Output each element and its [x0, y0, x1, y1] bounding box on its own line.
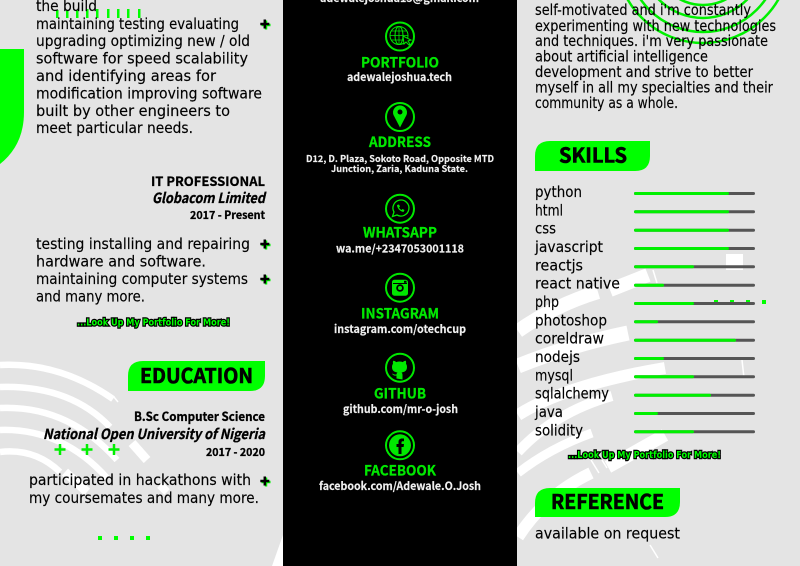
- contact: whatsapp: wa.me/+2347053001118: [336, 241, 464, 257]
- callout: portfolio link left: ...Look Up My Portfolio For More!: [77, 318, 230, 328]
- decoration: green concentric arcs: [616, 0, 790, 43]
- text block: about me: self-motivated and i'm constantly: [535, 1, 751, 19]
- text block: experience duties two: testing installing and repairing: [36, 235, 250, 253]
- skills list: [534, 183, 620, 439]
- skills list: react native: [535, 275, 620, 293]
- contact: instagram: INSTAGRAM: [361, 304, 439, 324]
- decoration: green side tab: [0, 49, 24, 164]
- heading: skills: SKILLS: [559, 140, 627, 168]
- text block: experience duties one: modification improving software: [36, 84, 262, 102]
- contact: facebook: FACEBOOK: [364, 461, 436, 481]
- skill bars: [634, 192, 755, 433]
- text block: experience duties two: [36, 235, 250, 306]
- contact: whatsapp: [336, 223, 464, 257]
- contact: facebook: [319, 461, 481, 494]
- skills list: sqlalchemy: [535, 385, 609, 403]
- decoration: green squares: [98, 536, 150, 540]
- bullets: plus markers: [260, 20, 270, 486]
- icon: map pin: [386, 103, 414, 131]
- education details: B.Sc Computer Science: [134, 406, 265, 425]
- text block: experience duties one: and identifying areas for: [36, 67, 217, 85]
- text: reference note: available on request: [535, 524, 680, 542]
- icon: facebook: [386, 431, 414, 459]
- skills list: python: [535, 183, 582, 201]
- skills list: html: [535, 201, 563, 219]
- text block: about me: about artificial intelligence: [535, 48, 708, 66]
- text block: about me: development and strive to better: [535, 63, 754, 81]
- skills list: mysql: [535, 366, 573, 384]
- skills list: php: [535, 293, 559, 311]
- skills list: reactjs: [535, 256, 583, 274]
- icon: instagram: [386, 274, 414, 302]
- skills list: nodejs: [535, 348, 580, 366]
- text block: education activities: participated in hackathons with: [29, 471, 251, 489]
- text block: experience duties one: software for speed scalability: [36, 50, 248, 68]
- text block: experience duties one: maintaining testing evaluating: [36, 15, 239, 33]
- text block: education activities: [29, 471, 259, 507]
- text block: experience duties one: meet particular needs.: [36, 119, 193, 137]
- callout: portfolio link right: ...Look Up My Portfolio For More!: [568, 450, 721, 461]
- contact: portfolio: adewalejoshua.tech: [347, 69, 452, 85]
- contact: instagram: [334, 304, 466, 337]
- contact: portfolio: [347, 52, 452, 85]
- contact: address: D12, D. Plaza, Sokoto Road, Opposite MTD: [306, 152, 494, 165]
- heading: education: EDUCATION: [140, 360, 253, 389]
- skills list: coreldraw: [535, 330, 604, 348]
- text block: about me: and techniques. i'm very passionate: [535, 32, 768, 50]
- contact: github: github.com/mr-o-josh: [343, 401, 458, 417]
- text block: experience duties one: upgrading optimizing new / old: [36, 32, 250, 50]
- skills list: javascript: [534, 238, 603, 256]
- contact: address: [306, 132, 494, 175]
- job heading: IT professional: IT PROFESSIONAL: [151, 171, 265, 190]
- decoration: green plus signs: [54, 444, 120, 455]
- panel: contact column: [283, 0, 517, 566]
- education details: [43, 406, 266, 460]
- icon: whatsapp: [386, 195, 414, 223]
- contact: instagram: instagram.com/otechcup: [334, 321, 466, 337]
- icon: github: [386, 354, 414, 382]
- contact: portfolio: PORTFOLIO: [361, 52, 439, 72]
- education details: National Open University of Nigeria: [43, 424, 266, 444]
- contact: address: Junction, Zaria, Kaduna State.: [331, 162, 468, 175]
- icon: globe: [386, 22, 414, 50]
- contact: facebook: facebook.com/Adewale.O.Josh: [319, 478, 481, 494]
- skills list: css: [535, 220, 556, 238]
- education details: 2017 - 2020: [206, 444, 265, 460]
- text block: experience duties one: [36, 0, 262, 137]
- contact: whatsapp: WHATSAPP: [363, 223, 437, 243]
- text block: experience duties two: and many more.: [36, 288, 145, 306]
- skills list: java: [534, 403, 563, 421]
- text block: experience duties one: built by other engineers to: [36, 102, 230, 120]
- heading: reference: REFERENCE: [551, 486, 664, 515]
- job heading: IT professional: 2017 - Present: [190, 207, 265, 223]
- contact: github: [343, 384, 458, 417]
- contact: address: ADDRESS: [368, 132, 431, 152]
- text block: about me: [535, 1, 776, 112]
- text block: education activities: my coursemates and many more.: [29, 489, 259, 507]
- decoration: green ticks: [56, 9, 140, 18]
- contact: github: GITHUB: [374, 384, 426, 404]
- job heading: IT professional: Globacom Limited: [152, 188, 267, 208]
- text block: about me: community as a whole.: [535, 94, 678, 112]
- heading: skills: [535, 140, 650, 171]
- decoration: green squares right: [714, 300, 766, 304]
- skills list: solidity: [535, 421, 583, 439]
- job heading: IT professional: [151, 171, 267, 223]
- skills list: photoshop: [535, 311, 607, 329]
- text block: experience duties two: hardware and software.: [36, 252, 206, 270]
- text block: experience duties two: maintaining computer systems: [36, 270, 248, 288]
